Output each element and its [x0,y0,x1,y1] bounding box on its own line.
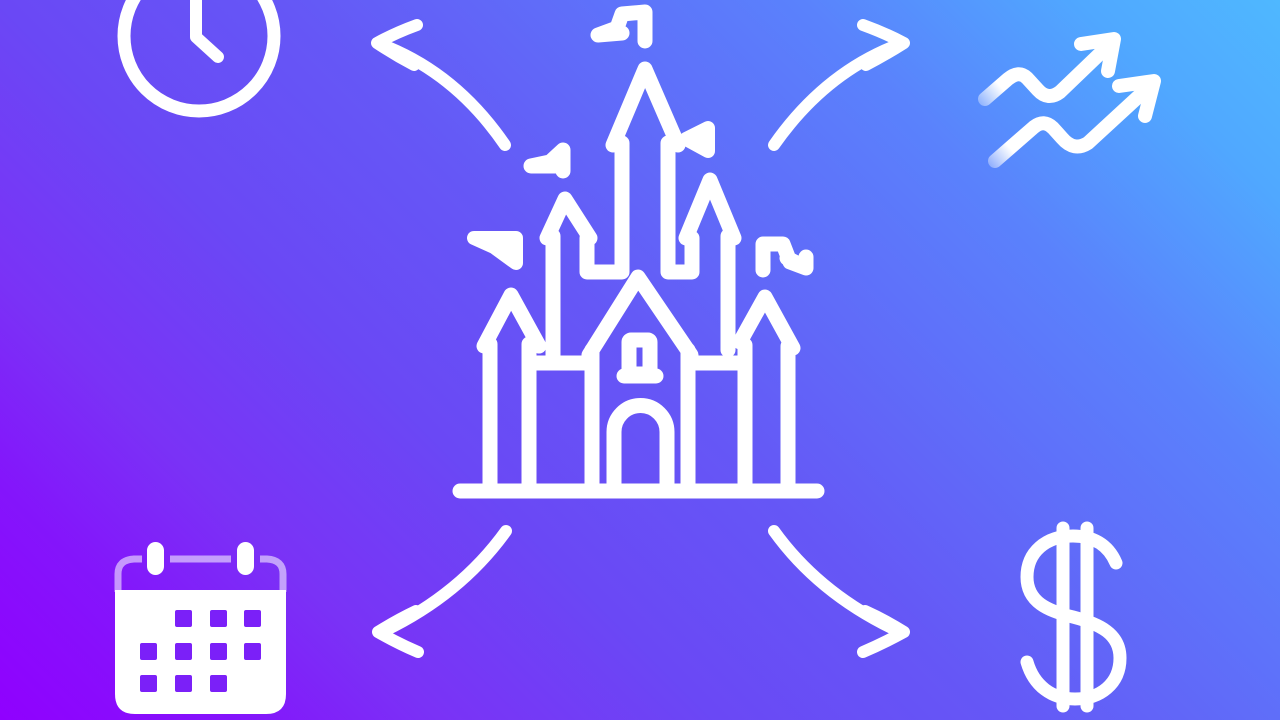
central gable [529,277,745,490]
calendar date cells [140,610,261,692]
icon: dollar sign [1027,528,1120,706]
gable window [624,340,656,376]
flag: far right [763,244,806,270]
icon: trend arrows [985,39,1154,161]
calendar frame [118,559,283,592]
arrow: bottom right [774,531,904,652]
flag: far left [474,238,516,263]
right outer tower [740,297,793,490]
flag: spire right [686,128,708,151]
castle door [614,406,667,490]
left inner tower [547,199,590,358]
flag: left [531,150,563,171]
icon: clock [124,0,274,111]
arrow: top left [377,25,505,145]
right inner tower [686,180,734,350]
left outer tower [484,295,539,490]
flag: top [598,12,645,41]
icon: calendar [115,542,286,714]
calendar body [115,590,286,714]
arrow: bottom left [378,531,506,652]
arrow: top right [774,25,904,145]
icon: castle [460,12,817,491]
central spire [587,69,692,272]
castle base line [460,484,817,498]
calendar rings [147,542,254,575]
